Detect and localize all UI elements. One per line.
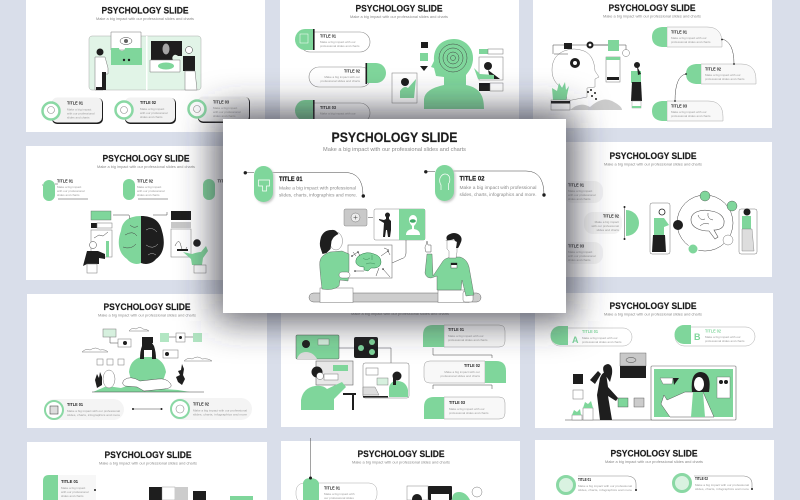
card: middle right title 02: slides and charts	[596, 228, 619, 232]
card: row three middle title 03: TITLE 03	[449, 400, 466, 405]
card: middle left title 01: Make a big impact	[57, 185, 82, 189]
card: top middle title 03: Make a big impact with our	[320, 112, 356, 116]
card: row four left title 01: slides and charts	[61, 494, 84, 498]
card: middle right title 03: TITLE 03	[568, 244, 585, 248]
callout: title 02	[424, 165, 546, 202]
slide: row three right clinician	[535, 293, 773, 428]
slide: middle left brain	[26, 146, 266, 280]
slide: row four middle: PSYCHOLOGY SLIDE	[358, 449, 445, 460]
illustration: brain halves and presenters	[83, 211, 208, 273]
slide: row three right clinician: PSYCHOLOGY SLIDE	[610, 301, 697, 312]
illustration: row four middle	[407, 486, 482, 500]
slide: top middle head maze	[280, 0, 519, 123]
slide: middle left brain: Make a big impact with our professional slides and charts	[97, 165, 195, 169]
illustration: laptop and woman	[565, 353, 736, 420]
card: row three right title A: Make a big impact with our	[582, 336, 618, 340]
card: top middle title 01: TITLE 01	[320, 34, 337, 38]
card: middle left title 01: slides and charts	[57, 193, 80, 197]
card: middle right title 01: TITLE 01	[568, 182, 585, 188]
slide: top left puzzle: Make a big impact with our professional slides and charts	[96, 17, 194, 21]
card: top left title 03: TITLE 03	[213, 100, 230, 104]
drop shadow of main slide	[215, 111, 574, 321]
slide: row three left meditation	[27, 294, 267, 428]
card: middle left title 02	[123, 178, 168, 200]
card: middle right title 03: Make a big impact	[568, 250, 593, 254]
card: row four right title 02: TITLE 02	[695, 476, 708, 481]
slide: top right head and gears: PSYCHOLOGY SLIDE	[608, 3, 696, 14]
connector: row three left	[132, 408, 162, 410]
slide: row four middle: Make a big impact with our professional slides and charts	[352, 460, 450, 464]
card: top left title 01: Make a big impact	[67, 108, 92, 112]
card: top left title 01: with our professional	[67, 112, 95, 116]
card: row four right title 01: slides, charts, infographics and more	[578, 488, 632, 492]
card: top right title 03: TITLE 03	[671, 104, 688, 108]
card: top middle title 03	[295, 100, 370, 123]
card: middle right title 02	[584, 206, 639, 240]
slide: top middle head maze: PSYCHOLOGY SLIDE	[356, 4, 443, 14]
panel: main slide	[223, 119, 566, 313]
card: top left title 01	[42, 98, 103, 124]
card: top right title 02	[686, 64, 756, 84]
card: middle left title 03	[203, 178, 236, 200]
card: top left title 03: Make a big impact	[213, 106, 238, 110]
person: woman with chart	[320, 230, 350, 290]
card: top right title 02: TITLE 02	[705, 66, 722, 72]
slide: middle right orbit brain	[533, 142, 772, 277]
chart: brain network	[348, 245, 392, 278]
card: row four middle title 01: Make a big impact with	[324, 492, 355, 496]
slide: row four left: PSYCHOLOGY SLIDE	[104, 450, 192, 461]
card: top right title 03: professional slides and charts	[671, 114, 711, 118]
card: top right title 03	[652, 101, 723, 121]
card: top right title 03: Make a big impact with our	[671, 110, 707, 114]
card: row three right title A: professional slides and charts	[582, 340, 622, 344]
card: middle right title 02: Make a big impact	[595, 220, 619, 224]
slide: row four right: Make a big impact with our professional slides and charts	[605, 460, 703, 464]
slide: top middle head maze: Make a big impact with our professional slides and charts	[350, 15, 448, 19]
card: row three left title 02	[170, 398, 252, 420]
card: top left title 02: TITLE 02	[140, 100, 157, 105]
callout: title 01: slides, charts, infographics and more.	[279, 192, 357, 198]
subtitle: Make a big impact with our professional slides and charts	[323, 147, 466, 153]
card: middle right title 02: with our professional	[591, 224, 619, 228]
card: middle left title 01	[42, 178, 88, 201]
icon: head	[440, 174, 450, 190]
icon: black figure	[379, 212, 391, 237]
callout: title 01	[244, 166, 365, 204]
card: row four right title 01	[558, 476, 637, 494]
card: top right title 02: professional slides and charts	[705, 77, 745, 81]
slide: row four right	[535, 440, 774, 500]
card: middle right title 01: with our professional	[568, 193, 596, 197]
card: row four left title 01: TITLE 01	[61, 479, 79, 484]
card: row four right title 01: Make a big impact with our professional	[578, 484, 632, 488]
card: top left title 02	[116, 98, 176, 124]
card: top right title 01: TITLE 01	[671, 30, 688, 34]
card: top left title 01: TITLE 01	[67, 100, 84, 106]
card: row three middle title 01: TITLE 01	[448, 327, 465, 332]
card: row three left title 01: TITLE 01	[67, 402, 84, 407]
card: row three left title 02: slides, charts, infographics and more	[193, 412, 247, 416]
illustration: meditating woman	[82, 328, 212, 392]
title: PSYCHOLOGY SLIDE	[332, 129, 458, 145]
slide: middle right orbit brain: Make a big impact with our professional slides and charts	[604, 162, 702, 166]
card: row three right title B: B	[694, 332, 701, 342]
card: row three left title 01: Make a big impact with our professional	[67, 409, 120, 413]
panel: figure and head cards	[374, 209, 425, 263]
card: row three left title 02: Make a big impact with our professional	[193, 408, 247, 412]
illustration: head with maze	[392, 39, 503, 109]
card: row three middle title 01: Make a big impact with our	[448, 334, 484, 338]
person: man pointing up	[425, 233, 474, 296]
card: row four middle title 01: our professional slides	[324, 496, 354, 500]
card: middle right title 03: slides and charts	[568, 258, 591, 262]
card: row four left title 01: with our professional	[61, 490, 89, 494]
icon: head bust	[406, 215, 420, 235]
card: top left title 01: slides and charts	[67, 116, 90, 120]
card: middle left title 02: with our professional	[137, 189, 165, 193]
card: row three middle title 01	[423, 325, 505, 347]
card: row three right title A: A	[572, 335, 579, 345]
card: row three left title 01: slides, charts, infographics and more	[67, 413, 120, 417]
card: top middle title 02	[309, 63, 386, 87]
card: row three right title B: professional slides and charts	[705, 339, 745, 343]
card: row three middle title 02	[424, 361, 506, 383]
card: middle left title 01: TITLE 01	[57, 178, 74, 184]
slide: top right head and gears: Make a big impact with our professional slides and charts	[603, 14, 701, 18]
card: middle right title 01	[564, 181, 603, 203]
card: row four right title 02	[674, 474, 753, 492]
card: middle right title 02: TITLE 02	[603, 214, 620, 218]
slide: row three middle online session: Make a big impact with our professional slides and charts	[351, 312, 449, 316]
card: row three right title A: TITLE 01	[582, 329, 599, 334]
card: middle left title 02: slides and charts	[137, 193, 160, 197]
card: row four left title 01: Make a big impact	[61, 486, 86, 490]
card: row three right title B: TITLE 02	[705, 328, 722, 334]
card: middle left title 01: with our professional	[57, 189, 85, 193]
card: middle right title 03	[564, 242, 603, 264]
callout: title 02: slides, charts, infographics and more.	[460, 192, 536, 197]
callout: title 02: TITLE 02	[460, 176, 485, 182]
slide: row four left: Make a big impact with our professional slides and charts	[99, 462, 197, 466]
card: row three middle title 01: professional slides and charts	[448, 338, 488, 342]
illustration: row four left puzzle	[149, 487, 253, 500]
slide: top left puzzle	[26, 0, 265, 132]
card: row four middle title 01	[296, 476, 377, 500]
icon: plus circle box	[344, 209, 373, 226]
callout: title 01: TITLE 01	[279, 177, 303, 183]
card: row three middle title 02: professional slides and charts	[440, 374, 480, 378]
card: row four right title 02: Make a big impact with our professional	[695, 483, 749, 487]
card: middle left title 02: TITLE 02	[137, 178, 154, 184]
card: top left title 02: Make a big impact	[140, 107, 165, 111]
card: top left title 03: slides and charts	[213, 114, 236, 118]
card: middle left title 02: Make a big impact	[137, 185, 162, 189]
card: row three middle title 02: TITLE 02	[464, 363, 481, 368]
card: row three right title A	[550, 326, 632, 346]
slide: row four right: PSYCHOLOGY SLIDE	[610, 448, 698, 460]
slide: row three left meditation: Make a big impact with our professional slides and charts	[98, 314, 196, 318]
card: middle left title 03: TITLE 03	[218, 178, 236, 184]
card: top right title 01	[652, 27, 722, 47]
callout: title 02: Make a big impact with professional	[460, 185, 536, 190]
card: middle right title 03: with our professional	[568, 254, 596, 258]
callout: title 01: Make a big impact with professional	[279, 186, 356, 190]
card: middle right title 01: slides and charts	[568, 197, 591, 201]
card: row four middle title 01: TITLE 01	[324, 486, 341, 490]
card: top right title 01: Make a big impact with our	[671, 36, 707, 40]
connectors: top right	[674, 39, 735, 102]
card: top left title 03	[188, 96, 250, 123]
card: row four left title 01	[43, 475, 96, 500]
card: top left title 02: with our professional	[140, 111, 168, 115]
card: top left title 02: slides and charts	[140, 115, 163, 119]
card: row three middle title 03	[424, 397, 505, 419]
card: row three middle title 03: Make a big impact with our	[449, 407, 485, 411]
slide: middle left brain: PSYCHOLOGY SLIDE	[102, 154, 190, 164]
card: middle right title 01: Make a big impact	[568, 189, 593, 193]
card: top middle title 02: professional slides and charts	[320, 79, 360, 83]
slide: row three right clinician: Make a big impact with our professional slides and charts	[604, 312, 702, 316]
card: top left title 03: with our professional	[213, 110, 241, 114]
card: top middle title 03: TITLE 03	[320, 105, 337, 110]
card: row three right title B	[674, 325, 755, 346]
illustration: therapist and patient online	[296, 335, 409, 410]
card: row three left title 02: TITLE 02	[193, 402, 210, 406]
card: row four right title 02: slides, charts, infographics and more	[695, 487, 749, 491]
card: top middle title 01: Make a big impact with our	[320, 40, 356, 44]
icon: speech bubbles	[258, 180, 270, 191]
slide: row four middle	[281, 438, 520, 500]
card: top right title 02: Make a big impact with our	[705, 73, 741, 77]
illustration: orbit brain with people	[650, 191, 757, 254]
card: row three right title B: Make a big impact with our	[705, 335, 741, 339]
illustration: two people with brain chart	[309, 209, 481, 302]
slide: top right head and gears	[533, 0, 772, 128]
card: top middle title 02: TITLE 02	[344, 68, 361, 74]
card: top right title 01: professional slides and charts	[671, 40, 711, 44]
card: row four right title 01: TITLE 01	[578, 477, 591, 482]
slide: row three left meditation: PSYCHOLOGY SLIDE	[104, 302, 191, 313]
card: top middle title 01: professional slides and charts	[320, 44, 360, 48]
slide: middle right orbit brain: PSYCHOLOGY SLIDE	[610, 151, 697, 162]
slide: row three middle online session	[281, 300, 520, 427]
slide: row four left	[27, 442, 267, 500]
slide: top left puzzle: PSYCHOLOGY SLIDE	[102, 6, 189, 16]
card: row three middle title 02: Make a big impact with our	[444, 370, 480, 374]
card: row three left title 01	[44, 399, 124, 420]
card: top middle title 02: Make a big impact with our	[324, 75, 360, 79]
illustration: head, gears and woman	[551, 40, 642, 110]
card: row three middle title 03: professional slides and charts	[449, 411, 489, 415]
card: top middle title 01	[295, 29, 370, 52]
connectors: row three middle	[433, 348, 492, 389]
table	[309, 288, 481, 302]
